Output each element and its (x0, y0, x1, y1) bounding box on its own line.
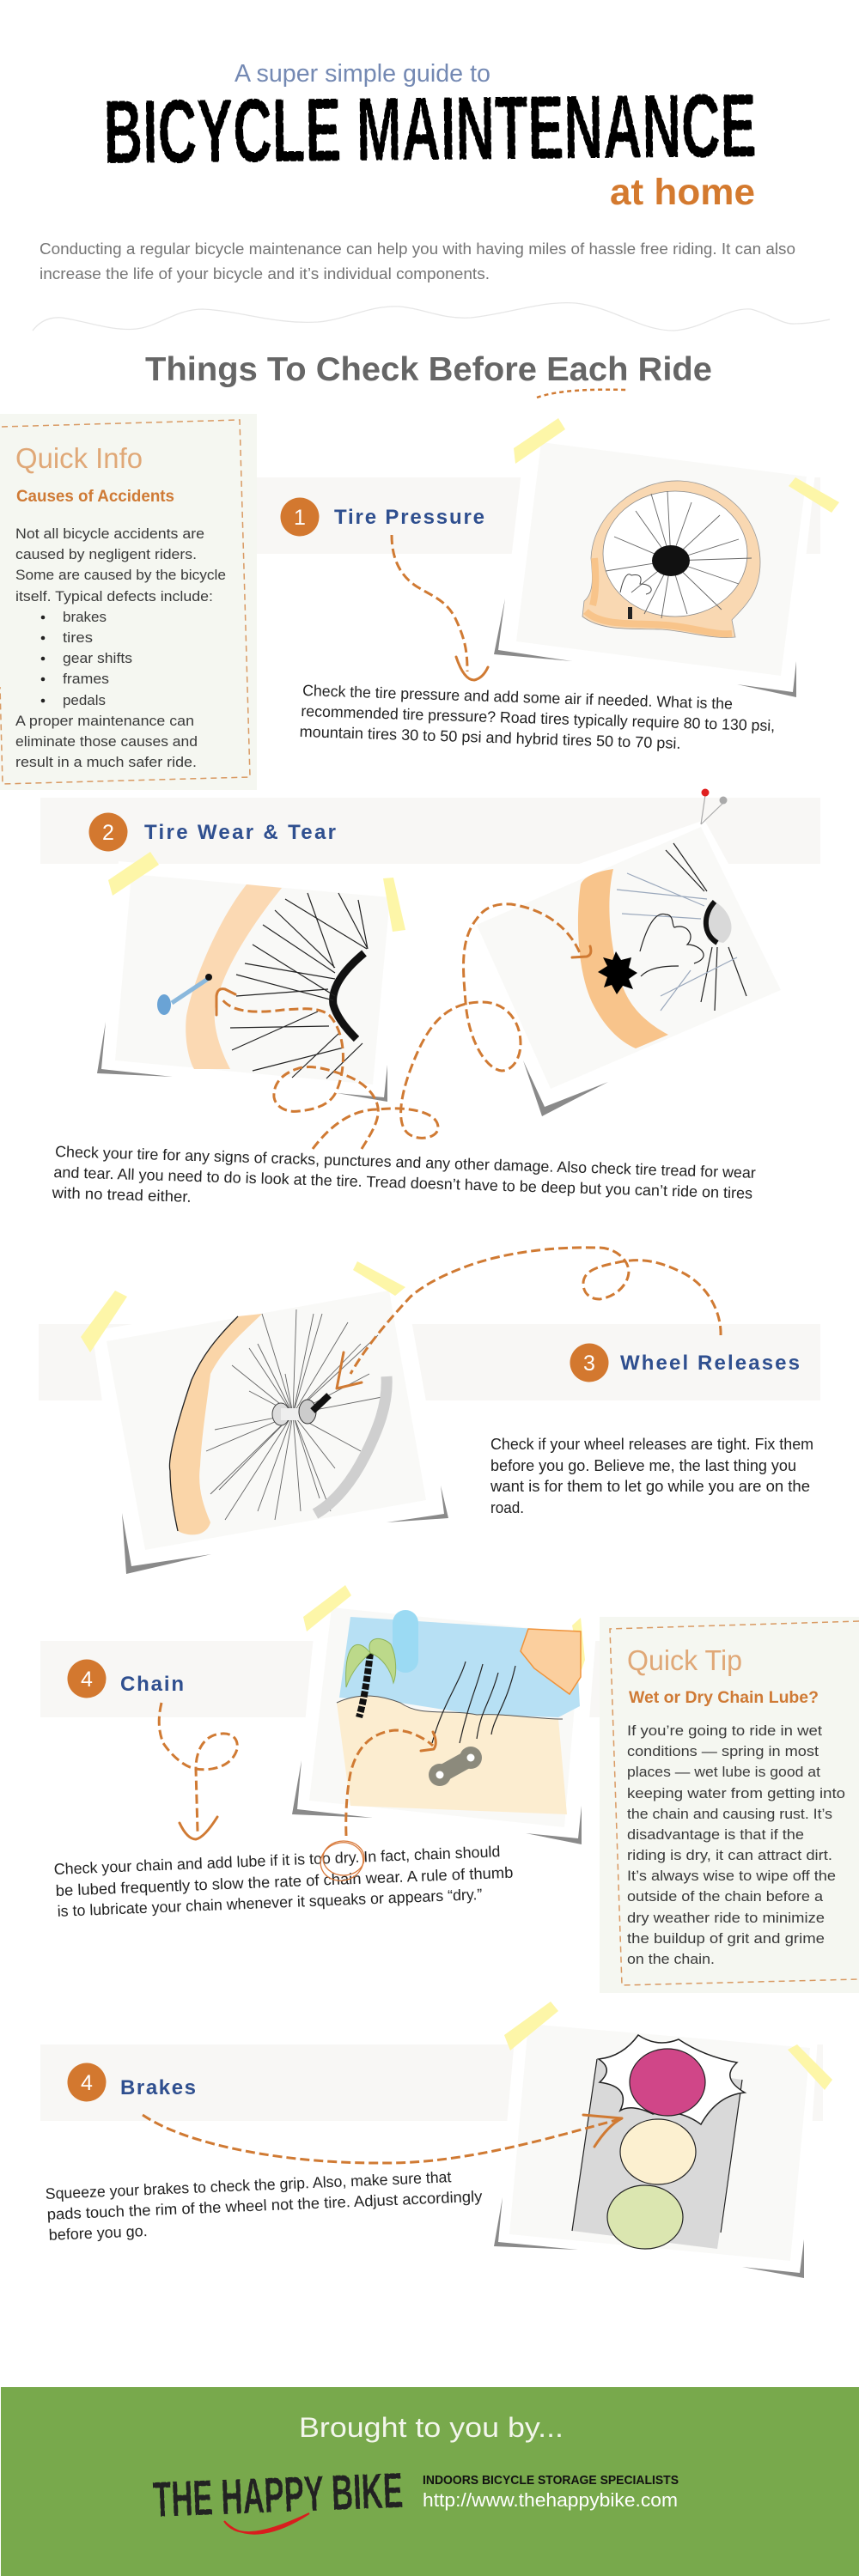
photo 1 (494, 418, 839, 697)
step 4 arrow down (159, 1703, 237, 1839)
step 3 text: want is for them to let go while you are on the (490, 1478, 810, 1495)
step 1: tire pressure (255, 418, 839, 755)
step 2 text: and tear. All you need to do is look at the tire. Tread doesn’t have to be deep but you can’t ride on tires (53, 1163, 752, 1202)
step 3 text: before you go. Believe me, the last thing you (490, 1457, 796, 1474)
footer logo: THE HAPPY BIKE (152, 2463, 404, 2528)
step 2 text (51, 1143, 756, 1223)
step 1 text: recommended tire pressure? Road tires typically require 80 to 130 psi, (301, 702, 775, 734)
step 5 number (67, 2063, 107, 2102)
quick tip subheading: Wet or Dry Chain Lube? (629, 1689, 819, 1707)
photo 5 (494, 2002, 832, 2278)
quick tip heading: Quick Tip (627, 1644, 742, 1676)
footer heading: Brought to you by... (299, 2412, 564, 2443)
quick info body: Not all bicycle accidents are (15, 526, 204, 542)
quick info body: gear shifts (63, 650, 132, 666)
panel: quick info (0, 414, 257, 790)
step 5: brakes (40, 2002, 832, 2278)
quick info body: pedals (63, 692, 106, 708)
circle around dry (316, 1838, 368, 1886)
step 4 title: Chain (120, 1673, 184, 1696)
quick info subheading: Causes of Accidents (16, 488, 174, 506)
step 2 text: with no tread either. (51, 1184, 192, 1206)
step 3 text (490, 1436, 813, 1516)
traffic light drawing (572, 2035, 745, 2249)
footer url: http://www.thehappybike.com (423, 2489, 678, 2511)
band 1 (255, 477, 820, 554)
quick tip body: It’s always wise to wipe off the (627, 1868, 836, 1884)
step 3 arrow (337, 1248, 721, 1388)
step 2 number: 2 (102, 821, 114, 845)
quick info body: Some are caused by the bicycle (15, 567, 226, 583)
step 2 title: Tire Wear & Tear (144, 821, 336, 844)
beach drawing (337, 1617, 581, 1814)
section heading: Things To Check Before Each Ride (145, 351, 712, 388)
subtitle: A super simple guide to (235, 60, 490, 88)
step 5 number: 4 (81, 2071, 93, 2095)
band 4 (40, 1641, 600, 1717)
step 2 number (89, 812, 127, 852)
step 5 arrow (143, 2115, 622, 2163)
step 3 text: road. (490, 1499, 524, 1516)
quick info body: frames (63, 671, 109, 687)
step 1 arrow (392, 535, 488, 680)
step 4 arrow to chain link (346, 1730, 436, 1836)
quick tip body: places — wet lube is good at (627, 1764, 820, 1780)
footer logo (152, 2463, 404, 2534)
step 5 text: pads touch the rim of the wheel not the tire. Adjust accordingly (46, 2188, 483, 2223)
step 1 text (299, 682, 776, 755)
title suffix: at home (610, 172, 755, 213)
step 1 number: 1 (294, 506, 306, 530)
panel: quick tip (600, 1617, 859, 1993)
photo 2b: puncture (461, 820, 799, 1116)
quick tip body: on the chain. (627, 1951, 715, 1967)
step 2 text: Check your tire for any signs of cracks, punctures and any other damage. Also check tire tread for wear (55, 1143, 756, 1182)
step 1 number (280, 498, 320, 536)
footer tagline: INDOORS BICYCLE STORAGE SPECIALISTS (423, 2473, 679, 2488)
band 2 (40, 798, 820, 864)
step 1 text: Check the tire pressure and add some air if needed. What is the (302, 682, 733, 713)
intro paragraph (40, 240, 795, 283)
quick tip body: disadvantage is that if the (627, 1826, 804, 1843)
quick info body: A proper maintenance can (15, 713, 194, 729)
step 5 title: Brakes (120, 2076, 196, 2099)
step 1 title: Tire Pressure (334, 506, 484, 529)
quick info body (15, 526, 226, 770)
step 3 number: 3 (583, 1352, 595, 1376)
step 5 text: before you go. (48, 2222, 148, 2244)
tire drawing (582, 481, 760, 638)
quick tip body: If you’re going to ride in wet (627, 1722, 822, 1739)
step 2: tire wear and tear (40, 788, 820, 1223)
quick info body: tires (63, 629, 93, 646)
step 4 text (53, 1843, 515, 1920)
quick tip body: riding is dry, it can attract dirt. (627, 1847, 832, 1863)
quick tip body: the buildup of grit and grime (627, 1930, 825, 1947)
step 4 number: 4 (81, 1668, 93, 1692)
quick tip body: keeping water from getting into (627, 1785, 845, 1801)
header block (40, 60, 795, 283)
quick tip body: dry weather ride to minimize (627, 1910, 825, 1926)
quick info body: result in a much safer ride. (15, 754, 197, 770)
step 3: wheel releases (39, 1248, 820, 1574)
quick tip body: conditions — spring in most (627, 1743, 819, 1759)
intro paragraph: increase the life of your bicycle and it’s individual components. (40, 265, 490, 283)
band 3 (39, 1324, 820, 1400)
pins (701, 788, 727, 824)
photo 4 (292, 1585, 597, 1844)
photo 2a: nail in tire (97, 852, 405, 1102)
step 2 arrow to puncture (313, 904, 591, 1149)
quick info body: eliminate those causes and (15, 733, 198, 750)
quick tip body: outside of the chain before a (627, 1888, 824, 1905)
quick info body: itself. Typical defects include: (15, 588, 213, 605)
step 4 text: is to lubricate your chain whenever it squeaks or appears “dry.” (57, 1886, 483, 1920)
intro paragraph: Conducting a regular bicycle maintenance can help you with having miles of hassle free riding. It can also (40, 240, 795, 258)
step 3 number (570, 1343, 608, 1382)
heading dashed flourish (537, 390, 626, 398)
footer (1, 2387, 859, 2576)
step 1 text: mountain tires 30 to 50 psi and hybrid tires 50 to 70 psi. (299, 723, 681, 752)
band 5 (40, 2044, 823, 2121)
step 2 arrow to nail (216, 989, 378, 1149)
step 5 text: Squeeze your brakes to check the grip. Also, make sure that (45, 2168, 452, 2202)
step 4 text: Check your chain and add lube if it is too dry. In fact, chain should (53, 1843, 501, 1878)
quick info body: brakes (63, 609, 107, 625)
quick info heading: Quick Info (15, 442, 143, 474)
quick info body: caused by negligent riders. (15, 546, 197, 562)
step 4: chain (40, 1585, 600, 1920)
step 3 title: Wheel Releases (620, 1352, 800, 1375)
step 3 text: Check if your wheel releases are tight. Fix them (490, 1436, 813, 1453)
quick tip body: the chain and causing rust. It’s (627, 1806, 832, 1822)
step 5 text (45, 2167, 484, 2244)
step 4 text: be lubed frequently to slow the rate of chain wear. A rule of thumb (55, 1864, 514, 1899)
step 4 number (67, 1659, 107, 1698)
photo 3 (81, 1261, 448, 1574)
quick tip body (627, 1722, 845, 1967)
